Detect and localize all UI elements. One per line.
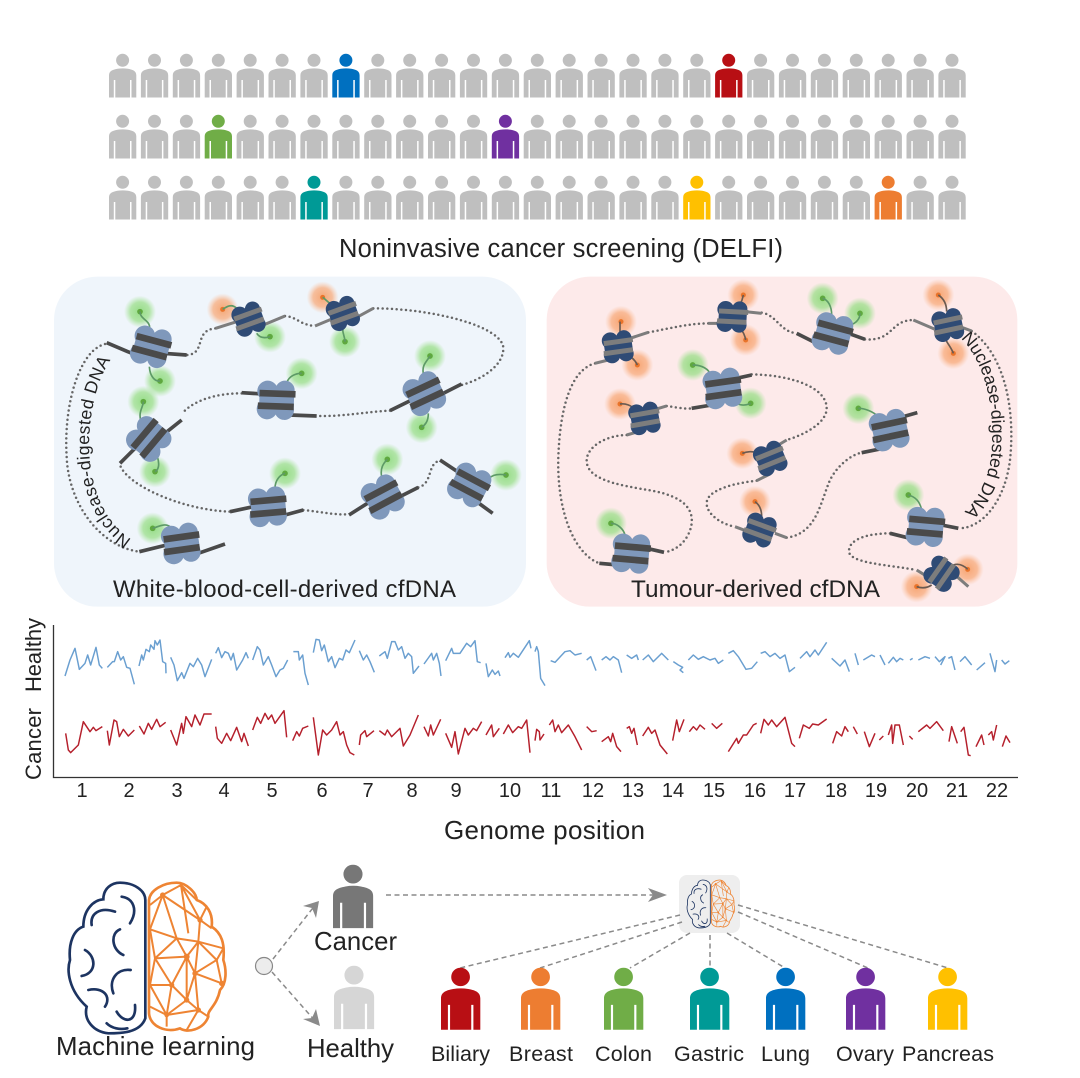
- nucleosome tails: [107, 308, 493, 553]
- nucleosome tails: [595, 312, 972, 587]
- healthy profile trace, chromosomes 1 to 10: [65, 639, 531, 685]
- cancer type: pancreas: [902, 968, 994, 1066]
- y-axis label: cancer: Cancer: [21, 708, 46, 780]
- x-axis label: Genome position: [444, 815, 645, 845]
- person row 3: [109, 176, 966, 220]
- panel label: Tumour-derived cfDNA: [631, 576, 881, 603]
- panel background: [547, 277, 1017, 607]
- chromosome number ticks: 22: [986, 780, 1008, 802]
- chromosome number ticks: 1: [76, 780, 88, 802]
- chromosome number ticks: 15: [703, 780, 725, 802]
- icon: cancer person: [333, 865, 373, 928]
- person row 2: [109, 115, 966, 158]
- nucleosomes: [601, 300, 967, 595]
- person row 1: [109, 54, 966, 98]
- classifier node: [256, 958, 272, 974]
- chromosome number ticks: 4: [218, 780, 230, 802]
- icon: machine learning brain: [69, 883, 226, 1033]
- chromosome number ticks: 6: [316, 780, 328, 802]
- chromosome number ticks: [76, 780, 1008, 802]
- chromosome number ticks: 17: [784, 780, 806, 802]
- cancer type: breast: [509, 968, 573, 1066]
- cancer profile trace, chromosomes 11 to 22: [535, 717, 1010, 756]
- heading: noninvasive cancer screening: Noninvasive cancer screening (DELFI): [339, 235, 783, 263]
- chromosome number ticks: 11: [541, 780, 561, 802]
- dotted linker DNA: [66, 308, 503, 552]
- panel background: [54, 277, 526, 607]
- label: healthy: Healthy: [307, 1035, 394, 1063]
- axes: [54, 625, 1018, 778]
- chromosome number ticks: 19: [865, 780, 887, 802]
- cancer type: lung: Lung: [761, 1042, 810, 1066]
- chromosome number ticks: 18: [825, 780, 847, 802]
- chromosome number ticks: 9: [450, 780, 462, 802]
- label: cancer: Cancer: [314, 928, 397, 956]
- panel: white-blood-cell-derived cfDNA: [54, 276, 526, 606]
- icon: tissue-of-origin classifier brain: [679, 875, 740, 933]
- curved label: nuclease-digested DNA: Nuclease-digested DNA: [962, 331, 1005, 516]
- chromosome number ticks: 16: [744, 780, 766, 802]
- chromosome number ticks: 7: [362, 780, 374, 802]
- dashed connectors to cancer types: [460, 905, 948, 968]
- cancer type: biliary: Biliary: [431, 1042, 490, 1066]
- chromosome number ticks: 14: [662, 780, 684, 802]
- arrow: cancer to tissue-of-origin classifier: [386, 888, 667, 902]
- chromosome number ticks: 13: [622, 780, 644, 802]
- methylation lobes: [595, 279, 984, 603]
- y-axis label: healthy: Healthy: [21, 618, 46, 692]
- methylation lobes: [124, 281, 522, 544]
- panel label: White-blood-cell-derived cfDNA: [113, 576, 456, 603]
- chromosome number ticks: 12: [582, 780, 604, 802]
- label: machine learning: Machine learning: [56, 1033, 255, 1061]
- cancer type: ovary: Ovary: [836, 1042, 894, 1066]
- chromosome number ticks: 5: [266, 780, 278, 802]
- cancer type: lung: [761, 968, 810, 1066]
- cancer type: pancreas: Pancreas: [902, 1042, 994, 1066]
- cancer type: gastric: [674, 968, 744, 1066]
- arrow: to cancer: [273, 901, 319, 959]
- population pictogram: screened individuals: [109, 54, 966, 219]
- panel: tumour-derived cfDNA: [546, 276, 1018, 606]
- cancer profile trace, chromosomes 1 to 10: [66, 711, 530, 755]
- nucleosomes: [121, 293, 496, 566]
- cancer type: gastric: Gastric: [674, 1042, 744, 1066]
- chromosome number ticks: 2: [123, 780, 135, 802]
- chart: genome-wide fragmentation profiles: [21, 618, 1018, 845]
- arrow: to healthy: [272, 972, 320, 1026]
- chromosome number ticks: 10: [499, 780, 521, 802]
- dotted linker DNA: [558, 313, 1011, 570]
- cancer type: colon: Colon: [595, 1042, 652, 1066]
- cancer type: colon: [595, 968, 652, 1066]
- curved label: nuclease-digested DNA: Nuclease-digested DNA: [76, 358, 130, 548]
- chromosome number ticks: 21: [946, 780, 968, 802]
- chromosome number ticks: 8: [406, 780, 418, 802]
- healthy profile trace, chromosomes 11 to 22: [535, 642, 1009, 686]
- chromosome number ticks: 20: [906, 780, 928, 802]
- cancer type: ovary: [836, 968, 894, 1066]
- chromosome number ticks: 3: [171, 780, 183, 802]
- cancer type: breast: Breast: [509, 1042, 573, 1066]
- cancer type: biliary: [431, 968, 490, 1066]
- icon: healthy person: [334, 966, 374, 1029]
